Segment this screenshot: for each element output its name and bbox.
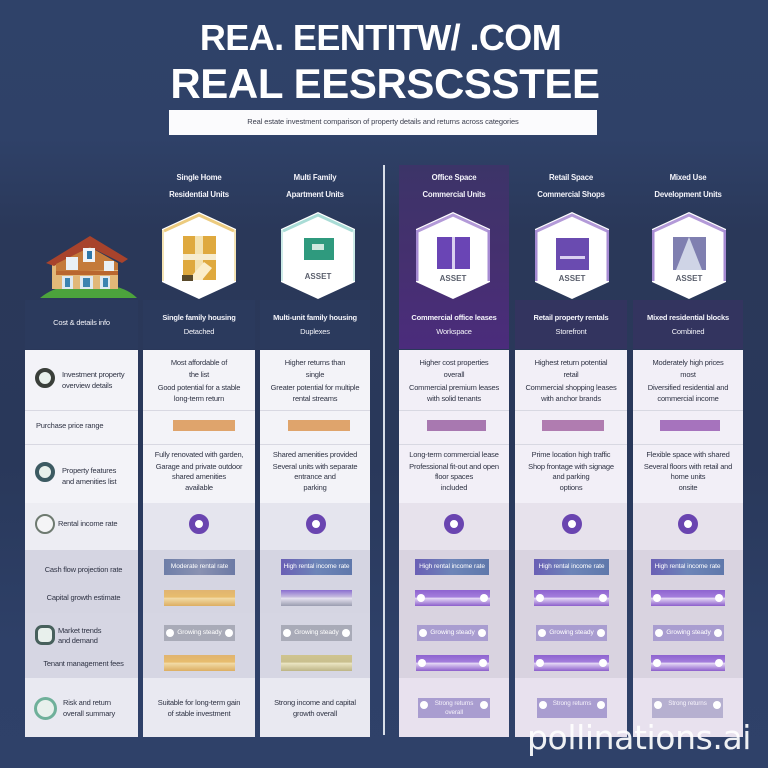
label: row one: overview details xyxy=(62,381,112,390)
text: row three xyxy=(528,450,614,492)
badge: pale xyxy=(417,625,488,641)
icon: purple hexagon: ASSET xyxy=(440,274,466,283)
badge: summary: Strong returns xyxy=(668,700,707,707)
badge: lavender xyxy=(651,590,725,606)
text: row one: Diversified residential and xyxy=(648,383,728,392)
icon: slate hexagon: ASSET xyxy=(676,274,702,283)
center divider xyxy=(383,165,385,735)
label: row one xyxy=(62,370,125,390)
purple column band xyxy=(399,165,509,349)
text: row three xyxy=(644,450,732,492)
panel: feature labels column xyxy=(25,318,138,737)
label: row six second: Tenant management fees xyxy=(43,659,124,668)
text: row three: onsite xyxy=(679,483,697,492)
text: row one: Commercial shopping leases xyxy=(525,383,617,392)
label: row three: and amenities list xyxy=(62,477,116,486)
badge: gold lower xyxy=(164,655,235,671)
watermark: pollinations.ai xyxy=(527,718,751,757)
badge: blue: High rental income rate xyxy=(284,563,349,570)
column heading: Duplexes xyxy=(300,327,330,336)
text: row seven: growth overall xyxy=(293,709,337,718)
column heading: Storefront xyxy=(556,327,586,336)
text: row one: Higher cost properties xyxy=(420,358,488,367)
title line two: REAL EESRSCSSTEE xyxy=(170,60,600,107)
label: row one: Investment property xyxy=(62,370,124,379)
text: row three: Long-term commercial lease xyxy=(409,450,499,459)
text: row one xyxy=(271,358,360,403)
text: row three: Professional fit-out and open xyxy=(409,462,499,471)
icon: purple hexagon xyxy=(416,212,490,299)
text: row one: long-term return xyxy=(174,394,224,403)
text: row one xyxy=(409,358,499,403)
text: row three: and parking xyxy=(552,472,590,481)
badge: indigo: High rental income rate xyxy=(539,563,604,570)
badge: gold xyxy=(164,590,235,606)
text: row seven: of stable investment xyxy=(168,709,230,718)
text: row three xyxy=(273,450,358,492)
badge: indigo: High rental income rate xyxy=(655,563,720,570)
column title: Residential Units xyxy=(169,190,229,199)
label: row seven xyxy=(63,698,116,718)
column title: Development Units xyxy=(654,190,722,199)
icon: row three xyxy=(35,462,55,482)
icon: ring xyxy=(444,514,464,534)
bar: mauve xyxy=(427,420,486,431)
column title: Mixed Use xyxy=(670,173,706,182)
column title: Apartment Units xyxy=(286,190,344,199)
column heading xyxy=(162,313,236,336)
badge: pale: Growing steady xyxy=(430,629,475,636)
column title: Multi Family xyxy=(294,173,336,182)
icon: slate hexagon xyxy=(652,212,726,299)
text: row three: Fully renovated with garden, xyxy=(155,450,243,459)
column heading xyxy=(533,313,608,336)
text: row one: retail xyxy=(563,370,579,379)
text: row three: Shop frontage with signage xyxy=(528,462,614,471)
text: row three: home units xyxy=(671,472,705,481)
title line one: REA. EENTITW/ .COM xyxy=(200,17,561,58)
badge: indigo xyxy=(415,559,489,575)
text: row three xyxy=(409,450,499,492)
icon: house xyxy=(40,236,137,298)
badge: summary xyxy=(537,698,607,718)
column heading xyxy=(273,313,357,336)
icon: row four xyxy=(35,514,55,534)
column heading xyxy=(647,313,729,336)
column heading: features: Cost & details info xyxy=(53,318,110,327)
column title xyxy=(537,173,605,199)
label: row seven: Risk and return xyxy=(63,698,111,707)
badge: blue xyxy=(281,559,352,575)
text: row one xyxy=(648,358,728,403)
label: row five second: Capital growth estimate xyxy=(47,593,120,602)
text: row three: Several floors with retail and xyxy=(644,462,732,471)
column heading: Detached xyxy=(184,327,214,336)
text: row three: Shared amenities provided xyxy=(273,450,357,459)
text: row three: entrance and xyxy=(294,472,336,481)
badge: pale: Growing steady xyxy=(549,629,594,636)
text: row one: overall xyxy=(444,370,464,379)
badge: lavender lower xyxy=(416,655,489,671)
text: row three xyxy=(155,450,243,492)
text: row one: rental streams xyxy=(293,394,337,403)
badge: silver: Growing steady xyxy=(294,629,339,636)
label: row four: Rental income rate xyxy=(58,519,117,528)
column title xyxy=(654,173,722,199)
icon: ring xyxy=(306,514,326,534)
badge: mixed xyxy=(281,590,352,606)
label: row five: Cash flow projection rate xyxy=(45,565,122,574)
column heading: Multi-unit family housing xyxy=(273,313,357,322)
bar: violet xyxy=(660,420,720,431)
text: row seven xyxy=(158,698,240,718)
column title: Single Home xyxy=(176,173,222,182)
badge: pale xyxy=(653,625,724,641)
text: row three: floor spaces xyxy=(435,472,473,481)
text: row three: Prime location high traffic xyxy=(532,450,610,459)
panel: column three purple xyxy=(399,165,509,737)
column title: Retail Space xyxy=(549,173,593,182)
bar: orange xyxy=(288,420,350,431)
text: row seven: Strong income and capital xyxy=(274,698,356,707)
badge: silver xyxy=(281,625,352,641)
text: row three: options xyxy=(560,483,582,492)
badge: summary xyxy=(652,698,723,718)
badge: summary: Strong returns overall xyxy=(435,700,473,716)
icon: row six xyxy=(35,625,55,645)
panel: column five purple xyxy=(633,173,743,737)
badge: indigo: High rental income rate xyxy=(419,563,485,570)
column title xyxy=(169,173,229,199)
column title: Commercial Units xyxy=(422,190,486,199)
text: row one: Most affordable of xyxy=(171,358,227,367)
icon: purple hexagon xyxy=(535,212,609,299)
text: row one: single xyxy=(306,370,324,379)
text: row three: Several units with separate xyxy=(273,462,357,471)
text: row one: with solid tenants xyxy=(427,394,481,403)
column heading: Mixed residential blocks xyxy=(647,313,729,322)
text: row three: shared amenities xyxy=(172,472,226,481)
badge: indigo xyxy=(534,559,609,575)
text: row one: Highest return potential xyxy=(535,358,607,367)
column title xyxy=(286,173,344,199)
badge: summary: Strong returns xyxy=(553,700,591,707)
text: row one: Higher returns than xyxy=(285,358,345,367)
text: row one xyxy=(525,358,617,403)
text: row seven: Suitable for long-term gain xyxy=(158,698,240,707)
label: row six: Market trends xyxy=(58,626,101,635)
panel: column one gold xyxy=(143,173,255,737)
panel: column two teal xyxy=(260,173,370,737)
badge: silver: Growing steady xyxy=(177,629,222,636)
badge: lavender lower xyxy=(651,655,725,671)
label: row six xyxy=(58,626,102,645)
badge: pale: Growing steady xyxy=(666,629,711,636)
label: row seven: overall summary xyxy=(63,709,115,718)
subtitle bar: Real estate investment comparison of property details and returns across categories xyxy=(247,117,519,126)
column heading xyxy=(411,313,497,336)
badge: olive xyxy=(281,655,352,671)
icon: teal hexagon xyxy=(281,212,355,299)
icon: teal hexagon: ASSET xyxy=(305,272,331,281)
column title xyxy=(422,173,486,199)
column heading: Combined xyxy=(672,327,704,336)
badge: summary xyxy=(418,698,490,718)
badge: silver xyxy=(164,625,235,641)
text: row three: parking xyxy=(303,483,327,492)
icon: ring xyxy=(678,514,698,534)
column heading: Workspace xyxy=(436,327,472,336)
badge: lavender xyxy=(415,590,490,606)
text: row one: commercial income xyxy=(657,394,719,403)
text: row one: Greater potential for multiple xyxy=(271,383,359,392)
label: row two: Purchase price range xyxy=(36,421,103,430)
label: row three: Property features xyxy=(62,466,116,475)
text: row one: most xyxy=(680,370,696,379)
text: row one: the list xyxy=(189,370,209,379)
text: row one: Moderately high prices xyxy=(652,358,724,367)
text: row three: Flexible space with shared xyxy=(646,450,730,459)
badge: pale xyxy=(536,625,607,641)
column title: Office Space xyxy=(432,173,476,182)
badge: lavender lower xyxy=(534,655,609,671)
icon: ring xyxy=(189,514,209,534)
text: row one: with anchor brands xyxy=(541,394,601,403)
text: row three: available xyxy=(185,483,213,492)
label: row three xyxy=(62,466,117,486)
text: row one: Commercial premium leases xyxy=(409,383,499,392)
text: row three: included xyxy=(441,483,467,492)
text: row three: Garage and private outdoor xyxy=(156,462,242,471)
icon: gold hexagon xyxy=(162,212,236,299)
badge: indigo xyxy=(651,559,724,575)
badge: lavender xyxy=(534,590,609,606)
icon: row one xyxy=(35,368,55,388)
text: row one: Good potential for a stable xyxy=(158,383,240,392)
label: row six: and demand xyxy=(58,636,98,645)
badge: slate xyxy=(164,559,235,575)
column heading: Commercial office leases xyxy=(411,313,497,322)
icon: ring xyxy=(562,514,582,534)
badge: slate: Moderate rental rate xyxy=(171,563,228,570)
icon: purple hexagon: ASSET xyxy=(559,274,585,283)
bar: orange xyxy=(173,420,235,431)
bar: mauve xyxy=(542,420,604,431)
subtitle bar xyxy=(169,110,597,135)
text: row one xyxy=(158,358,240,403)
column title: Commercial Shops xyxy=(537,190,605,199)
icon: row seven xyxy=(34,697,57,720)
text: row seven xyxy=(274,698,356,718)
column heading: Single family housing xyxy=(162,313,236,322)
column heading: Retail property rentals xyxy=(533,313,608,322)
panel: column four purple xyxy=(515,173,627,737)
